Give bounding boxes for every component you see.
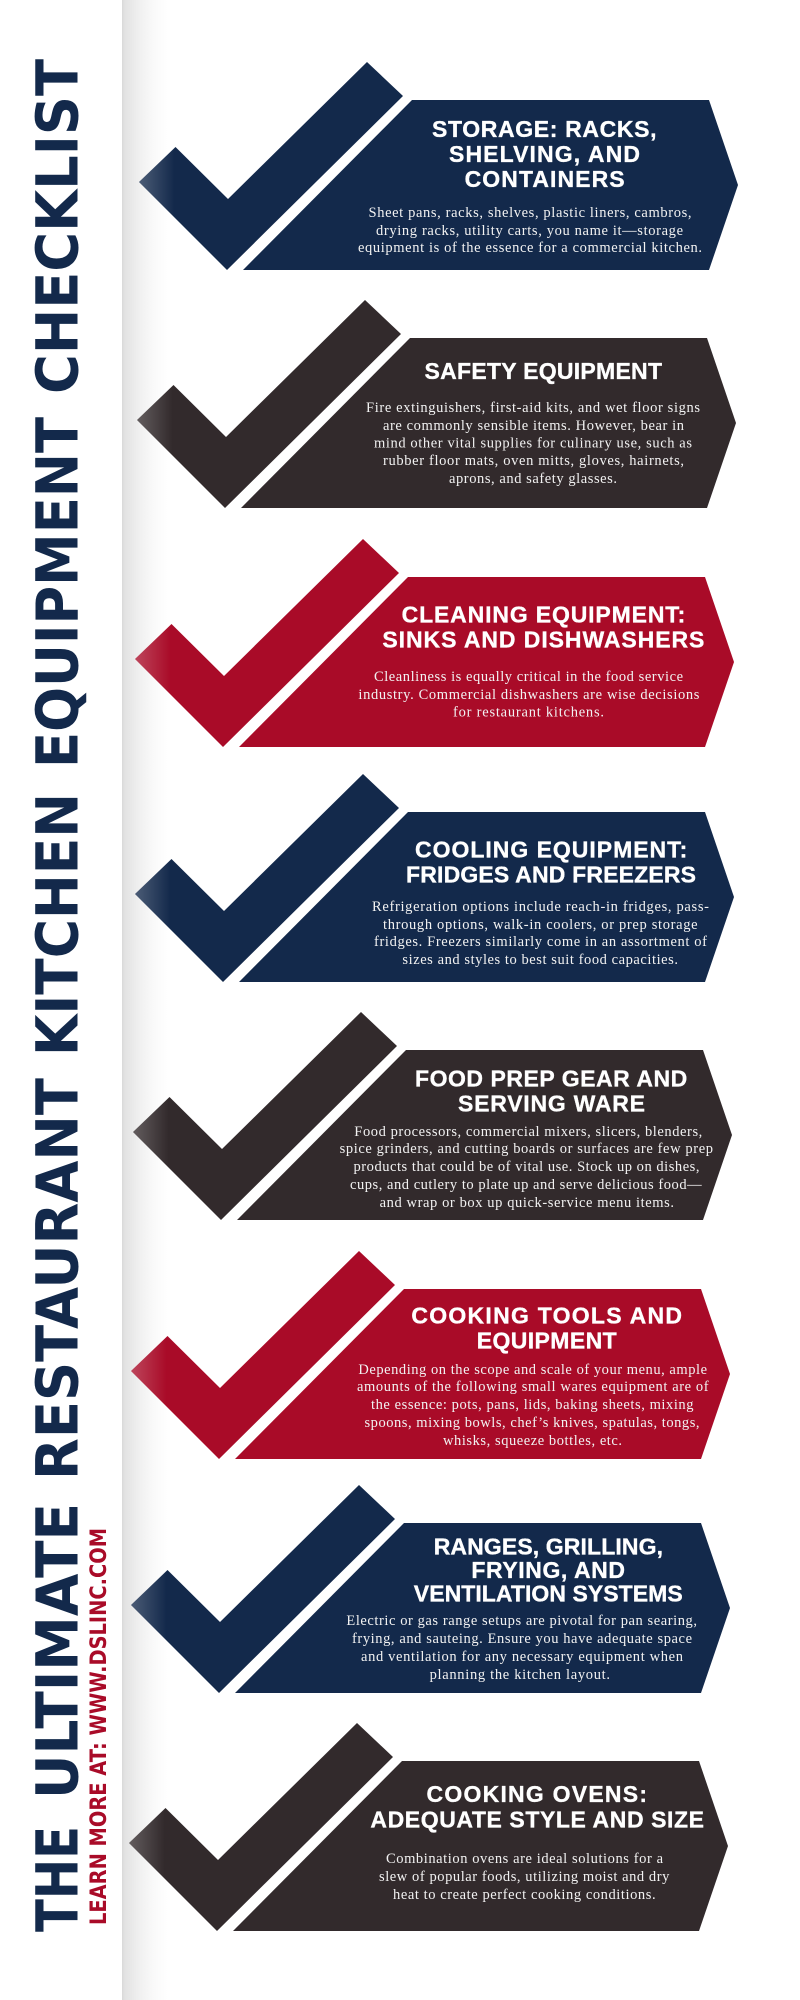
heading: FRIDGES AND FREEZERS [406, 862, 696, 888]
text block: sizes and styles to best suit food capacities. [402, 952, 678, 968]
heading: FRYING, AND [471, 1557, 625, 1583]
panel: storage [139, 62, 738, 270]
heading: FOOD PREP GEAR AND [415, 1066, 687, 1092]
banner [237, 1050, 732, 1220]
heading [406, 836, 696, 888]
text block: drying racks, utility carts, you name it—storage [376, 223, 683, 239]
text block: amounts of the following small wares equipment are of [357, 1379, 709, 1395]
panel: food prep [133, 1012, 732, 1220]
title [24, 59, 92, 1932]
text block [358, 205, 702, 256]
title: KITCHEN [24, 793, 92, 1056]
panel: ranges [131, 1485, 730, 1693]
heading: EQUIPMENT [477, 1328, 617, 1354]
text block: cups, and cutlery to plate up and serve delicious food— [350, 1177, 702, 1193]
text block: spice grinders, and cutting boards or surfaces are few prep [340, 1141, 713, 1157]
text block: Fire extinguishers, first-aid kits, and wet floor signs [366, 400, 700, 416]
heading: COOKING TOOLS AND [411, 1302, 682, 1328]
text block [346, 1613, 697, 1683]
icon: checkmark [135, 539, 399, 747]
heading [382, 602, 704, 652]
heading [415, 1066, 687, 1116]
panel: cooling [135, 774, 734, 982]
text block: aprons, and safety glasses. [449, 471, 617, 487]
heading: COOKING OVENS: [426, 1781, 647, 1807]
text block: Sheet pans, racks, shelves, plastic liners, cambros, [368, 205, 692, 221]
banner [239, 812, 734, 982]
icon: checkmark [131, 1251, 395, 1459]
heading: COOLING EQUIPMENT: [415, 836, 687, 862]
heading [414, 1534, 683, 1606]
banner [235, 1289, 730, 1459]
title: CHECKLIST [24, 59, 92, 394]
banner [235, 1523, 730, 1693]
website link: LEARN MORE AT: WWW.DSLINC.COM [87, 1528, 112, 1925]
text block: equipment is of the essence for a commercial kitchen. [358, 240, 702, 256]
icon: checkmark [131, 1485, 395, 1693]
heading: SAFETY EQUIPMENT [424, 358, 662, 384]
text block: whisks, squeeze bottles, etc. [443, 1433, 622, 1449]
heading: CLEANING EQUIPMENT: [402, 602, 685, 628]
title: ULTIMATE [24, 1503, 92, 1799]
text block [357, 1362, 709, 1449]
text block: industry. Commercial dishwashers are wise decisions [358, 687, 700, 703]
text block [340, 1124, 713, 1211]
text block: for restaurant kitchens. [453, 704, 604, 720]
text block: slew of popular foods, utilizing moist and dry [379, 1869, 670, 1885]
icon: checkmark [133, 1012, 397, 1220]
heading: SERVING WARE [458, 1090, 645, 1116]
title: RESTAURANT [24, 1078, 92, 1480]
heading: STORAGE: RACKS, [432, 116, 656, 142]
heading [432, 116, 656, 192]
heading: ADEQUATE STYLE AND SIZE [370, 1806, 704, 1832]
text block: Combination ovens are ideal solutions for a [386, 1851, 664, 1867]
heading: CONTAINERS [465, 166, 625, 192]
panel: safety [137, 300, 736, 508]
text block [379, 1851, 670, 1903]
text block [358, 669, 700, 720]
heading: SHELVING, AND [449, 141, 640, 167]
panel: cooking tools [131, 1251, 730, 1459]
heading: SINKS AND DISHWASHERS [382, 626, 704, 652]
panel: ovens [129, 1723, 728, 1931]
panel: cleaning [135, 539, 734, 747]
text block: are commonly sensible items. However, bear in [383, 418, 685, 434]
title: EQUIPMENT [24, 417, 92, 768]
heading: RANGES, GRILLING, [434, 1534, 663, 1560]
heading: VENTILATION SYSTEMS [414, 1580, 683, 1606]
heading [411, 1302, 682, 1354]
text block: heat to create perfect cooking conditions. [393, 1887, 656, 1903]
text block: spoons, mixing bowls, chef’s knives, spatulas, tongs, [364, 1415, 700, 1431]
icon: checkmark [139, 62, 403, 270]
banner [241, 338, 736, 508]
text block: Food processors, commercial mixers, slicers, blenders, [354, 1124, 702, 1140]
text block: the essence: pots, pans, lids, baking sheets, mixing [371, 1397, 694, 1413]
heading [370, 1781, 704, 1832]
text block: Electric or gas range setups are pivotal for pan searing, [346, 1613, 697, 1629]
banner [239, 577, 734, 747]
text block [366, 400, 700, 487]
text block: Depending on the scope and scale of your menu, ample [358, 1362, 707, 1378]
text block: planning the kitchen layout. [430, 1667, 610, 1683]
text block: and ventilation for any necessary equipment when [361, 1649, 684, 1665]
icon: checkmark [137, 300, 401, 508]
text block: Refrigeration options include reach-in fridges, pass- [372, 899, 709, 915]
icon: checkmark [129, 1723, 393, 1931]
text block: fridges. Freezers similarly come in an assortment of [374, 934, 707, 950]
text block: mind other vital supplies for culinary use, such as [374, 436, 692, 452]
text block: through options, walk-in coolers, or prep storage [383, 917, 698, 933]
text block: and wrap or box up quick-service menu items. [380, 1195, 674, 1211]
banner [243, 100, 738, 270]
icon: checkmark [135, 774, 399, 982]
text block: frying, and sauteing. Ensure you have adequate space [352, 1631, 692, 1647]
title: THE [24, 1826, 92, 1932]
text block: rubber floor mats, oven mitts, gloves, hairnets, [383, 453, 684, 469]
text block [372, 899, 709, 968]
text block: products that could be of vital use. Stock up on dishes, [354, 1159, 700, 1175]
text block: Cleanliness is equally critical in the food service [374, 669, 683, 685]
banner [233, 1761, 728, 1931]
